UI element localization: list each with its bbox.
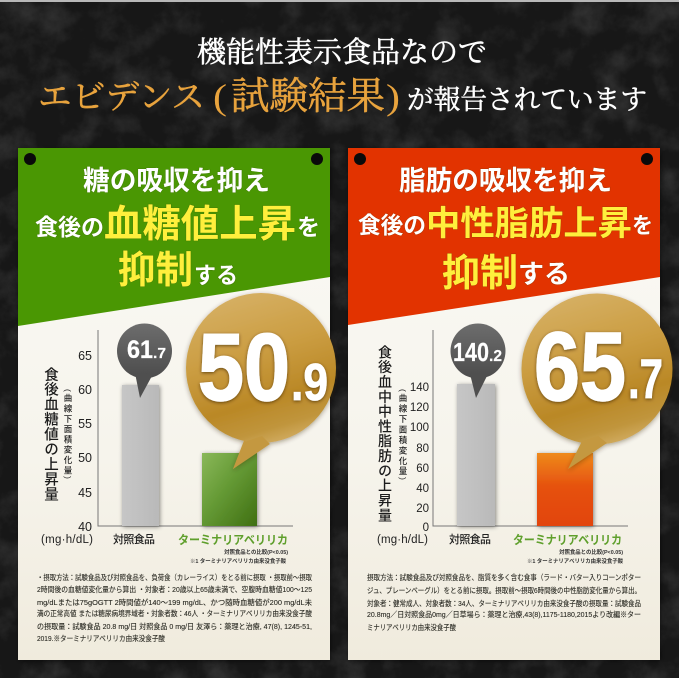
heading: 中性脂肪上昇 (426, 205, 632, 243)
product bubble: 50 (198, 314, 290, 421)
product bar (202, 453, 257, 526)
chart notes (190, 548, 288, 565)
y axis title: 食後血中中性脂肪の上昇量 (377, 345, 393, 522)
x axis labels (113, 532, 288, 547)
heading: 糖の吸収を抑え (83, 166, 270, 196)
title line 2: ( (213, 77, 227, 117)
x axis labels: 対照食品 (449, 532, 491, 546)
footnote: 2019.※ターミナリアベリリカ由来没食子酸 (37, 633, 165, 643)
footnote: の摂取量：試験食品 20.8 mg/日 対照食品 0 mg/日 友澤ら：薬理と治療, 47(8), 1245-51, (37, 621, 312, 631)
footnote: ・摂取方法：試験食品及び対照食品を、負荷食（カレーライス）をとる前に摂取 ・摂取前～摂取 (37, 572, 312, 582)
product bubble (186, 293, 336, 469)
title line 2 (38, 76, 647, 118)
heading: 抑制 (118, 250, 193, 292)
y axis subtitle: (曲線下面積変化量) (398, 389, 408, 480)
chart notes: 対照食品との比較(P<0.05) (559, 548, 623, 556)
footnote: 摂取方法：試験食品及び対照食品を、脂質を多く含む食事（ラード・バター入りコーンポター (367, 572, 641, 582)
panel background (348, 148, 660, 660)
footnote (367, 572, 641, 632)
footnote: ミナリアベリリカ由来没食子酸 (367, 622, 456, 632)
x axis labels: 対照食品 (113, 532, 155, 546)
y axis ticks: 20 (416, 503, 429, 515)
axes (98, 330, 293, 526)
y axis ticks: 120 (410, 402, 429, 414)
y axis subtitle: (曲線下面積変化量) (63, 389, 73, 479)
heading: する (518, 259, 570, 289)
heading: する (194, 262, 238, 288)
control bar (457, 384, 495, 526)
footnote: 2時間後の血糖値変化量から算出 ・対象者：20歳以上65歳未満で、空腹時血糖値100～125 (37, 584, 312, 594)
chart notes (527, 548, 624, 565)
control bar (122, 385, 159, 526)
red header band (348, 148, 660, 325)
footnote: 20.8mg／日対照食品0mg／日草場ら：薬理と治療,43(8),1175-1180,2015より改編※ター (367, 609, 641, 619)
panel background (18, 148, 330, 660)
y axis ticks (78, 349, 92, 534)
product bubble (522, 294, 672, 469)
punch holes (354, 153, 653, 165)
footnote: mg/dLまたは75gOGTT 2時間値が140～199 mg/dL、かつ随時血糖値が200 mg/dL未 (37, 597, 312, 607)
heading (358, 166, 653, 295)
title line 2: エビデンス (38, 80, 205, 116)
control bubble: .2 (489, 348, 502, 365)
y axis ticks: 50 (78, 451, 92, 465)
panel: blood sugar (18, 148, 336, 660)
chart notes: 対照食品との比較(P<0.05) (224, 548, 288, 556)
punch holes (24, 153, 323, 165)
heading (35, 166, 320, 292)
product bubble: .9 (291, 354, 328, 412)
heading: 食後の (35, 214, 104, 240)
y axis ticks: 40 (78, 520, 92, 534)
footnote: 満の正常高値 または糖尿病境界域者・対象者数：46人 ・ターミナリアベリリカ由来没食子酸 (37, 608, 312, 618)
heading: 脂肪の吸収を抑え (399, 166, 612, 196)
y axis ticks: 60 (416, 463, 429, 475)
y axis ticks: 55 (78, 417, 92, 431)
control bubble (450, 324, 506, 398)
x axis labels (449, 532, 622, 547)
panel: triglycerides (348, 148, 672, 660)
unit: (mg·h/dL) (377, 534, 428, 546)
control bubble: 140 (453, 337, 489, 367)
y axis title: 食後血糖値の上昇量 (42, 367, 58, 501)
title line 2: ) (386, 77, 400, 117)
y axis ticks: 40 (416, 483, 429, 495)
chart notes: ※1 ターミナリアベリリカ由来没食子酸 (527, 557, 624, 565)
y axis ticks: 65 (78, 349, 92, 363)
axes (433, 330, 628, 526)
product bubble: .7 (628, 347, 663, 410)
bar chart (41, 293, 336, 565)
product bar (537, 453, 593, 526)
title line 1: 機能性表示食品なので (197, 36, 487, 69)
heading: を (632, 213, 653, 238)
y axis ticks (410, 382, 429, 534)
x axis labels: ターミナリアベリリカ (513, 533, 622, 547)
y axis ticks: 100 (410, 422, 429, 434)
unit: (mg·h/dL) (41, 534, 93, 546)
control bubble (117, 324, 172, 398)
heading: 抑制 (442, 253, 518, 295)
y axis ticks: 60 (78, 383, 92, 397)
chart notes: ※1 ターミナリアベリリカ由来没食子酸 (190, 557, 287, 565)
bar chart (377, 294, 672, 565)
heading: 血糖値上昇 (104, 204, 296, 246)
heading: 食後の (358, 212, 426, 238)
y axis ticks: 45 (78, 486, 92, 500)
y axis ticks: 0 (423, 522, 429, 534)
title line 2: が報告されています (407, 85, 647, 115)
y axis ticks: 80 (416, 443, 429, 455)
green header band (18, 148, 330, 326)
control bubble: .7 (153, 345, 166, 362)
title line 2: 試験結果 (231, 76, 385, 118)
footnote (37, 572, 312, 643)
x axis labels: ターミナリアベリリカ (178, 533, 288, 547)
control bubble: 61 (127, 336, 153, 364)
title (38, 36, 647, 118)
product bubble: 65 (534, 312, 626, 421)
footnote: 対象者：健常成人、対象者数：34人、ターミナリアベリリカ由来没食子酸の摂取量：試験食品 (367, 598, 641, 608)
y axis ticks: 140 (410, 382, 429, 394)
heading: を (297, 214, 320, 240)
